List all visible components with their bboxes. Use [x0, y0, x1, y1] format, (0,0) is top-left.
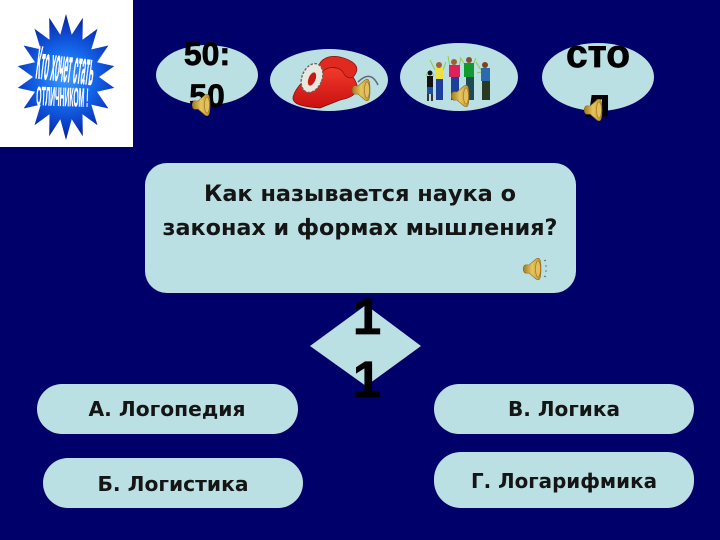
lifeline: 50:50: 50 [189, 78, 225, 114]
answer D [434, 452, 694, 508]
lifeline: audience [400, 43, 518, 111]
icon: speaker [451, 85, 469, 107]
answer B: В. Логика [508, 397, 620, 421]
lifeline: phone [270, 49, 388, 111]
logo text: Кто хочет стать [34, 38, 97, 96]
answer A: А. Логопедия [88, 397, 246, 421]
icon: blue star [18, 14, 114, 140]
icon: speaker [584, 99, 602, 121]
lifeline: friend table [542, 33, 654, 125]
logo panel [0, 0, 133, 147]
question number diamond [310, 288, 421, 408]
icon: speaker [523, 258, 547, 280]
logo text: ОТЛИЧНИКОМ ! [36, 83, 89, 114]
lifeline: 50:50 [156, 36, 258, 116]
icon: people [426, 56, 490, 101]
question number diamond: 1 [353, 351, 381, 408]
answer B [434, 384, 694, 434]
icon: speaker [352, 79, 370, 101]
lifeline: friend table: л [586, 82, 610, 125]
lifeline: friend table: сто [566, 33, 630, 76]
answer A [37, 384, 298, 434]
lifeline: 50:50: 50: [184, 36, 230, 72]
question text [162, 182, 558, 241]
answer D: Г. Логарифмика [471, 469, 657, 493]
question text: Как называется наука о [204, 182, 516, 207]
question number diamond: 1 [353, 288, 381, 345]
question text: законах и формах мышления? [162, 216, 558, 241]
answer C [43, 458, 303, 508]
icon: speaker [192, 94, 210, 116]
question panel [145, 163, 576, 293]
answer C: Б. Логистика [98, 472, 248, 496]
icon: red telephone [293, 56, 378, 108]
